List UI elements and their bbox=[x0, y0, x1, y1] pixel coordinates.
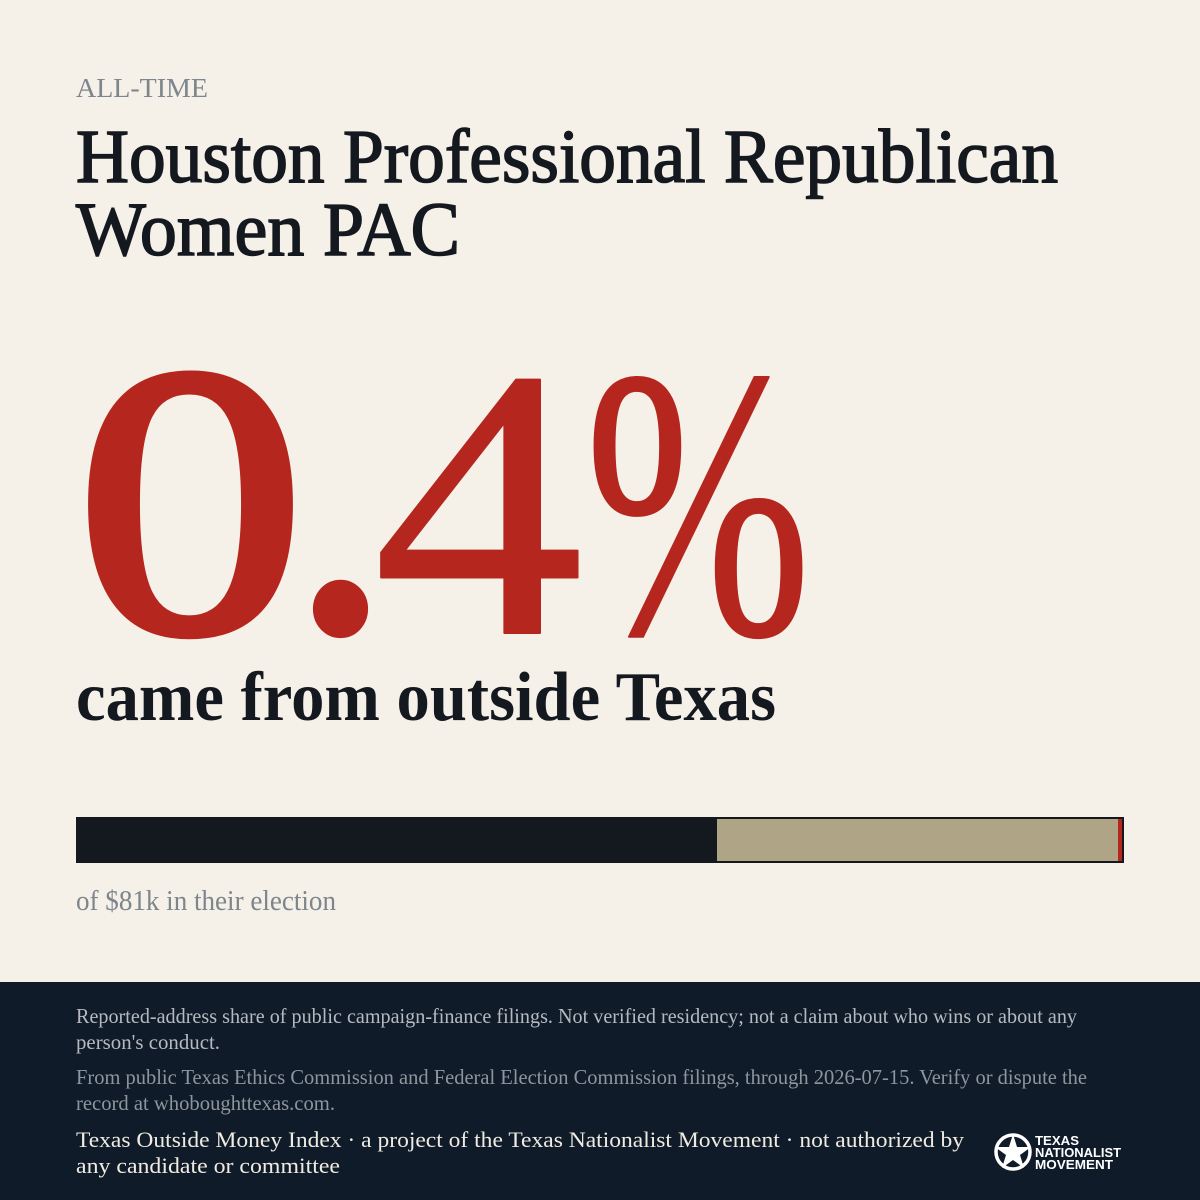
logo: Texas Nationalist Movement bbox=[995, 1133, 1121, 1172]
attribution text bbox=[76, 1127, 964, 1178]
big statistic: 0.4%: . bbox=[298, 312, 383, 711]
big statistic: 0.4%: 4 bbox=[373, 291, 584, 717]
bar caption: of $81k in their election bbox=[76, 886, 336, 917]
disclaimer text: Reported-address share of public campaign-finance filings. Not verified residency; not a claim about who wins or about any bbox=[76, 1004, 1077, 1028]
title bbox=[76, 115, 1058, 272]
title: Houston Professional Republican bbox=[76, 115, 1058, 199]
attribution text: Texas Outside Money Index · a project of the Texas Nationalist Movement · not authorized by bbox=[76, 1127, 964, 1152]
big statistic: 0.4%: % bbox=[585, 291, 811, 717]
logo: Texas Nationalist Movement: NATIONALIST bbox=[1035, 1145, 1121, 1160]
stacked bar: share of money by source bbox=[76, 817, 1124, 863]
title: Women PAC bbox=[76, 188, 460, 272]
source text: record at whoboughttexas.com. bbox=[76, 1091, 335, 1115]
logo: Texas Nationalist Movement: TEXAS bbox=[1035, 1133, 1079, 1148]
source text: From public Texas Ethics Commission and Federal Election Commission filings, through 2026-07-15. Verify or dispute the bbox=[76, 1065, 1087, 1089]
attribution text: any candidate or committee bbox=[76, 1153, 340, 1178]
big statistic: 0.4% bbox=[76, 289, 811, 717]
eyebrow label: ALL-TIME bbox=[76, 73, 208, 103]
disclaimer text bbox=[76, 1004, 1077, 1054]
footer band bbox=[0, 982, 1200, 1200]
logo: Texas Nationalist Movement: MOVEMENT bbox=[1035, 1157, 1113, 1172]
big statistic: 0.4%: 0 bbox=[76, 289, 305, 715]
source text bbox=[76, 1065, 1087, 1115]
disclaimer text: person's conduct. bbox=[76, 1030, 220, 1054]
statistic caption: came from outside Texas bbox=[76, 659, 776, 736]
